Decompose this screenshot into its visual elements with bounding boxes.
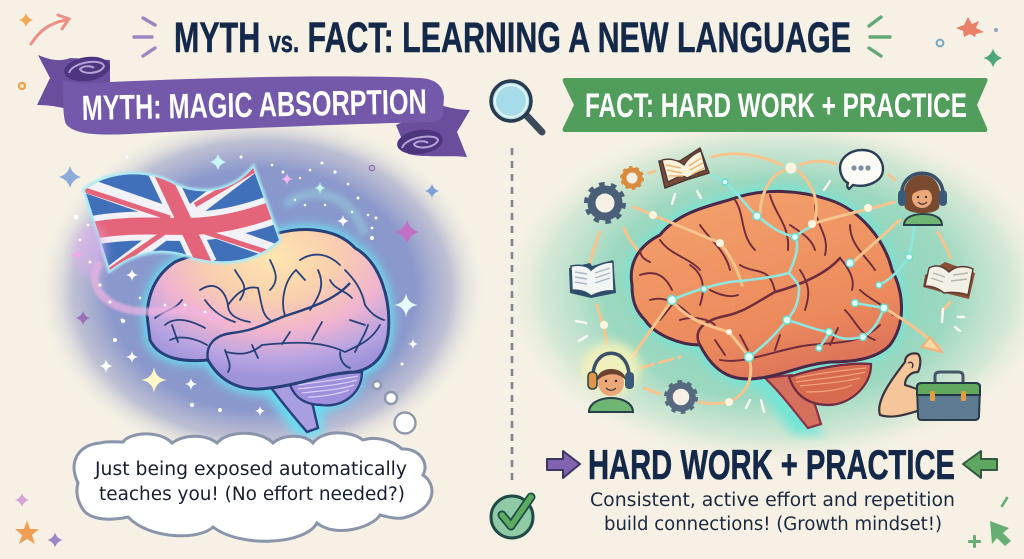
- orange connection lines: [588, 154, 950, 404]
- icon: person with headset bottom left: [581, 342, 641, 412]
- decorations: bottom left stars: [15, 493, 62, 548]
- fact description: Consistent, active effort and repetition: [590, 490, 955, 511]
- myth banner ribbon: [37, 54, 470, 157]
- icon: toolbox: [917, 372, 980, 420]
- fact description: [590, 490, 955, 535]
- cerebrum: [631, 191, 902, 379]
- left arrow pointing to heading: [547, 451, 580, 478]
- icon: open book top: [659, 148, 709, 188]
- teal neural pathways: [672, 175, 915, 357]
- icon: union jack flag: [85, 160, 285, 278]
- icon: person with headset top right: [898, 173, 947, 225]
- magic sparkle trail: [71, 156, 404, 412]
- myth brain illustration: [147, 230, 389, 432]
- icon: gear bottom: [666, 382, 696, 412]
- thought bubble: [74, 433, 432, 541]
- brain stem: [765, 375, 821, 428]
- bubble text: Just being exposed automatically: [94, 459, 407, 480]
- icon: magnifying glass: [491, 81, 542, 132]
- cerebrum: [147, 230, 389, 389]
- icon: book left: [569, 260, 616, 298]
- title accent: left dashes: [134, 18, 155, 56]
- divider dashed line: [511, 148, 513, 482]
- cerebellum: [290, 372, 362, 405]
- icon: flexed arm: [879, 353, 928, 417]
- thought bubble: teaches you! (No effort needed?): [99, 484, 405, 505]
- icon: small orange gear: [622, 168, 642, 188]
- temporal lobe: [207, 283, 350, 360]
- right arrow pointing to heading: [963, 451, 997, 478]
- decorations: top left: [19, 13, 69, 89]
- title accent: right dashes: [869, 17, 890, 56]
- temporal lobe and folds: [640, 195, 893, 361]
- icon: check mark circle: [491, 496, 533, 538]
- icon: large gear: [586, 184, 624, 222]
- icon: book right: [923, 262, 975, 299]
- panel: myth background halo: [37, 112, 487, 468]
- decorations: bottom right arrow: [968, 498, 1011, 548]
- fact brain illustration: [631, 191, 902, 430]
- icon: speech bubble: [840, 150, 883, 189]
- network nodes: [600, 162, 912, 406]
- radiating accent ticks: [576, 181, 964, 412]
- fact banner ribbon: [563, 78, 988, 132]
- panel: fact background halo: [498, 112, 1024, 468]
- cerebellum: [789, 364, 871, 405]
- myth banner heading: MYTH: MAGIC ABSORPTION: [81, 82, 427, 128]
- fact description: build connections! (Growth mindset!): [604, 514, 942, 535]
- thought bubble dots: [373, 381, 416, 434]
- decorations: top right: [937, 17, 1002, 68]
- arrow head: connection to muscle: [922, 337, 942, 352]
- sparkles around myth brain: [59, 154, 439, 416]
- brain stem: [270, 384, 318, 432]
